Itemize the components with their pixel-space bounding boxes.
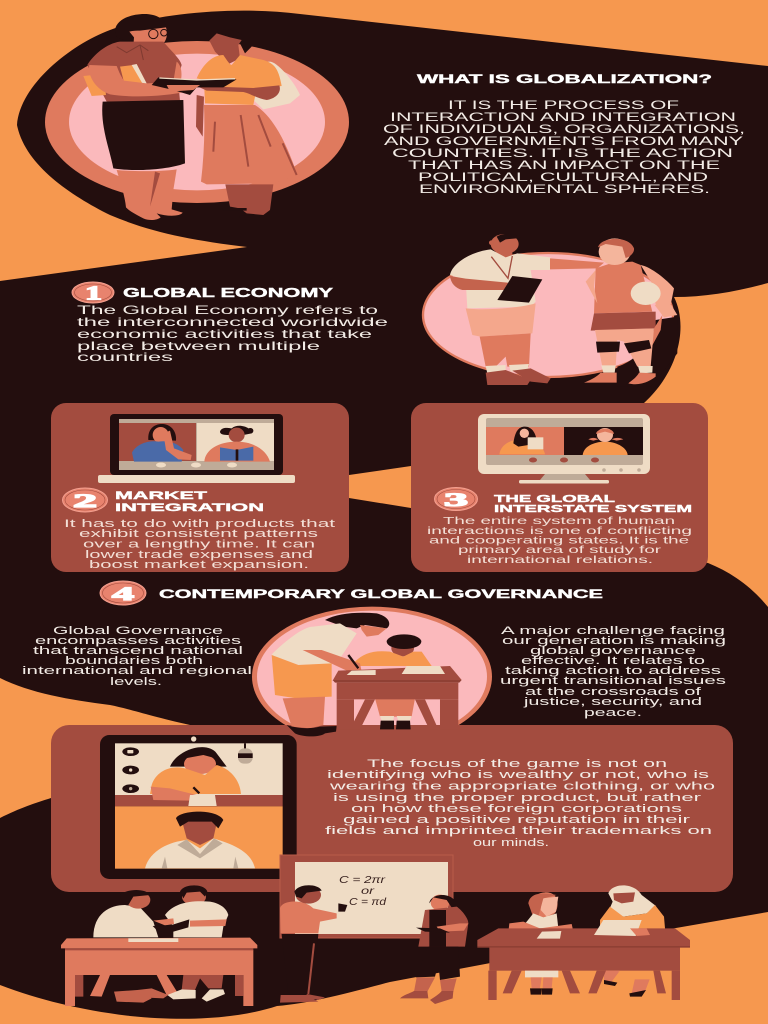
text: market integration description: lower trade expenses and bbox=[85, 549, 313, 561]
text: interstate system description: interactions is one of conflicting bbox=[427, 526, 693, 537]
text: interstate system description: The entire system of human bbox=[443, 516, 675, 527]
badge 1 bbox=[72, 282, 114, 304]
text: global governance right column: global governance bbox=[530, 645, 696, 657]
text: market integration description: exhibit consistent patterns bbox=[79, 528, 318, 540]
badge 4 bbox=[100, 581, 146, 605]
text: global governance right column: effective. It relates to bbox=[521, 655, 705, 667]
heading: what is globalization: WHAT IS GLOBALIZATION? bbox=[417, 72, 712, 86]
text: market integration description: over a lengthy time. It can bbox=[83, 538, 315, 550]
illustration: whiteboard with formula bbox=[280, 855, 453, 938]
text: global economy definition: The Global Economy refers to bbox=[77, 304, 378, 317]
text: global governance right column: at the crossroads of bbox=[525, 686, 701, 698]
text: brand focus paragraph bbox=[325, 758, 715, 849]
heading: contemporary global governance: CONTEMPORARY GLOBAL GOVERNANCE bbox=[159, 589, 604, 601]
illustration: two women with a book bbox=[45, 14, 349, 220]
panel: market integration bbox=[51, 403, 349, 572]
text: market integration description: It has to do with products that bbox=[64, 518, 335, 530]
text: global governance right column: peace. bbox=[584, 707, 642, 719]
illustration: students at right desk bbox=[477, 885, 690, 1000]
text: global governance right column: A major challenge facing bbox=[501, 625, 725, 637]
text: brand focus paragraph: is using the proper product, but rather bbox=[333, 792, 702, 804]
heading: the global interstate system: THE GLOBAL bbox=[494, 493, 616, 505]
illustration backdrop: pink ellipse behind teacher bbox=[252, 607, 492, 747]
text: brand focus paragraph: identifying who is wealthy or not, who is bbox=[327, 769, 710, 781]
text: global governance right column: urgent transitional issues bbox=[500, 675, 726, 687]
text: brand focus paragraph: our minds. bbox=[473, 837, 549, 849]
text: global governance left column: boundaries both bbox=[65, 655, 203, 667]
text: global governance right column: our generation is making bbox=[502, 635, 726, 647]
heading: market integration: MARKET bbox=[115, 490, 208, 502]
text: interstate system description: and cooperating states. It is the bbox=[429, 536, 690, 546]
text: global governance left column: international and regional bbox=[22, 665, 252, 677]
heading: market integration bbox=[115, 490, 264, 514]
text: circumference formula: or bbox=[361, 886, 375, 897]
icon: tablet video call bbox=[100, 735, 297, 879]
text: definition of globalization: OF INDIVIDUALS, ORGANIZATIONS, bbox=[383, 122, 745, 136]
text: definition of globalization bbox=[383, 98, 745, 196]
badge 2 bbox=[62, 488, 108, 512]
text: global governance right column bbox=[500, 625, 726, 719]
text: definition of globalization: INTERACTION AND INTEGRATION bbox=[390, 110, 736, 124]
text: definition of globalization: POLITICAL, CULTURAL, AND bbox=[418, 170, 708, 184]
text: global governance right column: taking action to address bbox=[505, 665, 721, 677]
text: global governance left column: that transcend national bbox=[33, 645, 243, 657]
icon: desktop monitor video call bbox=[478, 414, 650, 484]
heading: the global interstate system bbox=[494, 493, 692, 515]
illustration: students at left desk and teacher bbox=[61, 885, 347, 1006]
text: circumference formula: C = πd bbox=[349, 897, 387, 908]
heading: the global interstate system: INTERSTATE SYSTEM bbox=[494, 503, 692, 515]
panel: global interstate system bbox=[411, 403, 708, 572]
text: global governance left column: levels. bbox=[110, 676, 162, 688]
section 4 heading row bbox=[100, 581, 604, 605]
text: interstate system description: primary area of study for bbox=[458, 545, 662, 556]
badge 1: 1 bbox=[85, 282, 102, 304]
text: global governance left column bbox=[22, 625, 252, 688]
icon: laptop video call bbox=[98, 414, 295, 483]
text: definition of globalization: ENVIRONMENTAL SPHERES. bbox=[419, 182, 710, 196]
heading: market integration: INTEGRATION bbox=[115, 502, 264, 514]
text: definition of globalization: AND GOVERNMENTS FROM MANY bbox=[384, 134, 743, 148]
text: global economy definition: place between multiple bbox=[77, 340, 320, 353]
text: brand focus paragraph: fields and imprinted their trademarks on bbox=[325, 825, 712, 837]
text: global economy definition: the interconnected worldwide bbox=[77, 316, 388, 329]
text: definition of globalization: THAT HAS AN IMPACT ON THE bbox=[408, 158, 720, 172]
illustration: coach and volleyball player bbox=[423, 234, 677, 387]
badge 2: 2 bbox=[73, 491, 97, 512]
heading: global economy: GLOBAL ECONOMY bbox=[123, 286, 334, 300]
illustration: woman with clipboard bbox=[400, 895, 468, 1004]
text: definition of globalization: IT IS THE PROCESS OF bbox=[448, 98, 679, 112]
illustration: teacher helping student at desk bbox=[272, 613, 462, 736]
text: global governance left column: Global Governance bbox=[53, 625, 223, 637]
text: global governance right column: justice, security, and bbox=[522, 696, 702, 708]
section 1: global economy bbox=[72, 282, 388, 364]
badge 4: 4 bbox=[112, 584, 135, 605]
text: interstate system description bbox=[427, 516, 693, 566]
text: global economy definition: economic activities that take bbox=[77, 328, 372, 341]
badge 3: 3 bbox=[444, 490, 468, 511]
text: brand focus paragraph: gained a positive reputation in their bbox=[343, 814, 691, 826]
panel: bottom brown card bbox=[51, 725, 733, 892]
text: interstate system description: international relations. bbox=[467, 555, 653, 566]
text: circumference formula bbox=[339, 875, 387, 908]
text: global economy definition bbox=[77, 304, 388, 364]
text: circumference formula: C = 2πr bbox=[339, 875, 386, 886]
text: market integration description: boost market expansion. bbox=[89, 559, 309, 571]
text: definition of globalization: COUNTRIES. IT IS THE ACTION bbox=[392, 146, 733, 160]
text: global governance left column: encompasses activities bbox=[35, 635, 241, 647]
text: brand focus paragraph: on how these foreign corporations bbox=[351, 803, 683, 815]
text: global economy definition: countries bbox=[77, 351, 173, 364]
badge 3 bbox=[434, 488, 478, 511]
text: brand focus paragraph: wearing the appropriate clothing, or who bbox=[328, 780, 715, 792]
text: market integration description bbox=[64, 518, 335, 571]
text: brand focus paragraph: The focus of the game is not on bbox=[367, 758, 667, 770]
